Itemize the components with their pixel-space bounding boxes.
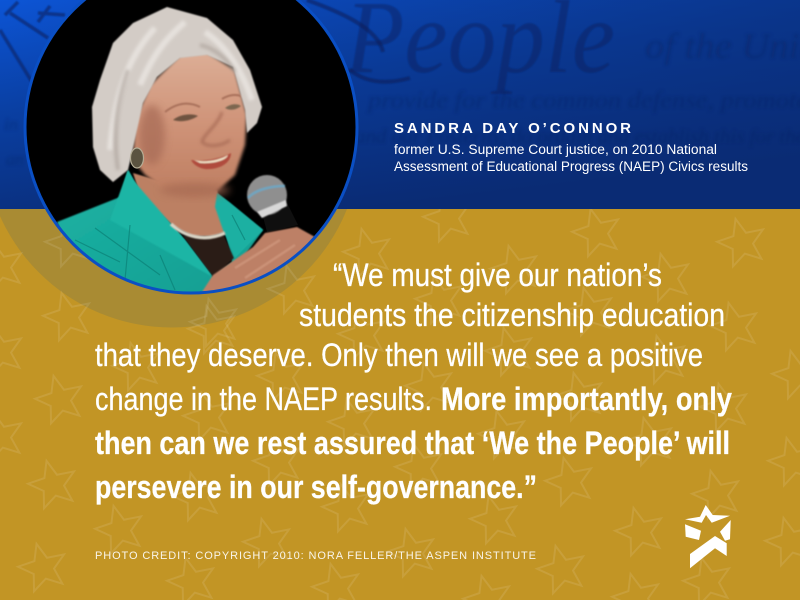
hand: [202, 227, 315, 293]
quote line 2: students the citizenship education: [299, 297, 725, 333]
dark shirt: [183, 236, 234, 277]
jacket creases: [75, 215, 245, 290]
right collar: [215, 193, 263, 258]
speaker description line 1: former U.S. Supreme Court justice, on 2010 National: [394, 142, 717, 157]
microphone body: [262, 203, 298, 232]
star pattern background: [0, 188, 800, 600]
photo credit: PHOTO CREDIT: COPYRIGHT 2010: NORA FELLER/THE ASPEN INSTITUTE: [95, 550, 536, 562]
hair highlights: [110, 22, 252, 150]
hand highlights: [235, 240, 295, 278]
cheek shadow: [139, 105, 165, 165]
icon: star logo: [685, 505, 731, 568]
quote line 4 regular: change in the NAEP results.: [95, 381, 432, 417]
face: [133, 52, 247, 197]
blue header band with faded script: and our Posterity, do ordain and establish this for the: [355, 126, 800, 148]
hair shadow: [116, 45, 235, 170]
blue header band with faded script: in: [4, 114, 18, 134]
quote line 3: that they deserve. Only then will we see a positive: [95, 337, 703, 373]
quote line 4 bold: More importantly, only: [441, 381, 732, 417]
hair: [92, 7, 262, 182]
speaker description line 2: Assessment of Educational Progress (NAEP) Civics results: [394, 159, 748, 174]
left collar: [110, 170, 213, 277]
blue header band with faded script: an: [6, 149, 24, 169]
attribution: [394, 120, 748, 174]
blue header band with faded script: [0, 0, 800, 209]
nose: [202, 112, 230, 146]
microphone head: [247, 175, 287, 218]
jaw shadow: [160, 183, 230, 197]
quote line 6 bold: persevere in our self-governance.”: [95, 469, 537, 505]
blue header band with faded script: provide for the common defense, promote: [366, 88, 800, 114]
gold lower panel: [0, 209, 800, 600]
neck: [133, 173, 226, 240]
eyes and brows: [165, 95, 243, 121]
portrait photo circle: [25, 0, 357, 300]
jacket body: [57, 170, 263, 300]
blue header band with faded script: of the Unit: [645, 26, 800, 66]
speaker name: SANDRA DAY O’CONNOR: [394, 120, 631, 137]
quote line 1: “We must give our nation’s: [333, 257, 662, 293]
earring: [130, 148, 144, 168]
necklace: [171, 224, 225, 238]
photo drop shadow circle: [0, 209, 347, 328]
smile: [191, 153, 231, 169]
quote: [95, 257, 732, 505]
